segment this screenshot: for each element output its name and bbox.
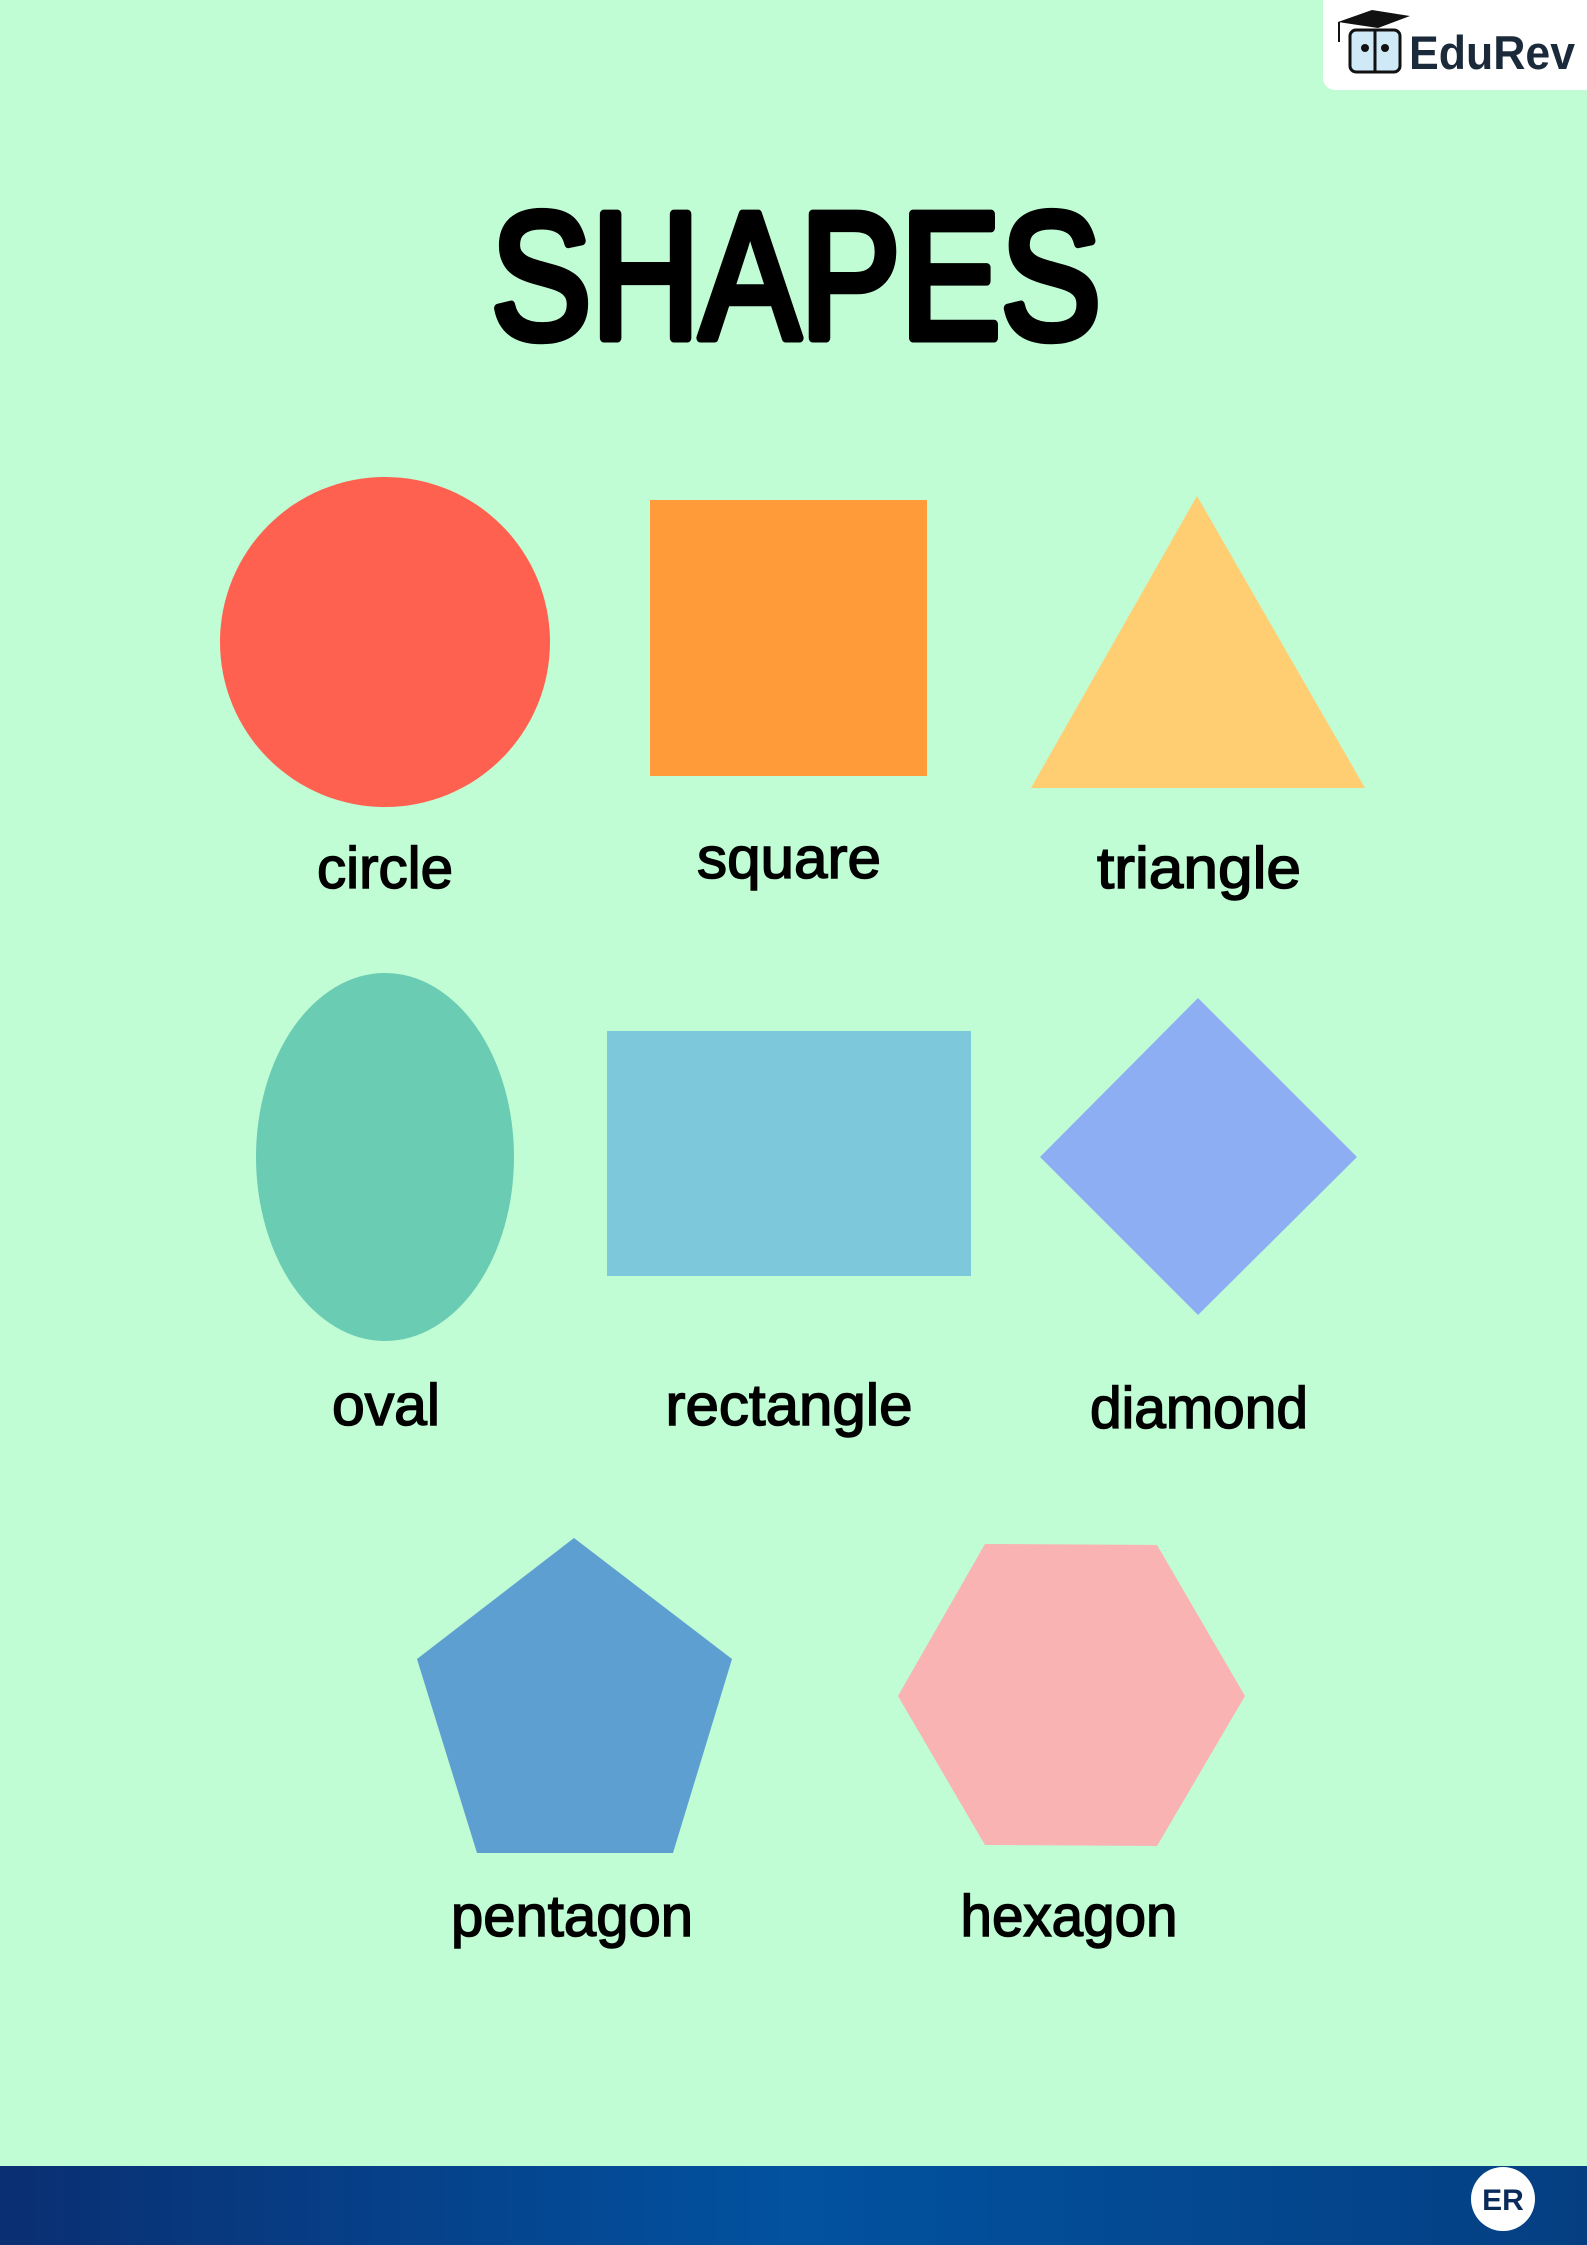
shape: hexagon: hexagon — [960, 1884, 1178, 1949]
shape: square — [650, 500, 927, 891]
footer bar — [0, 2166, 1587, 2245]
shape: circle — [220, 477, 550, 901]
shape: triangle — [1031, 496, 1365, 901]
shape: oval — [256, 973, 514, 1438]
shape: diamond: diamond — [1090, 1376, 1308, 1441]
shape: rectangle — [607, 1031, 971, 1438]
icon: ER badge: ER — [1482, 2184, 1524, 2217]
shape: pentagon — [417, 1538, 732, 1949]
shape: square: square — [697, 826, 881, 891]
logo: EduRev — [1323, 0, 1587, 90]
shape: pentagon: pentagon — [451, 1884, 693, 1949]
title: SHAPES — [491, 176, 1101, 377]
shape: hexagon — [898, 1544, 1245, 1949]
icon: graduation cap book — [1338, 10, 1410, 72]
shape: oval: oval — [332, 1373, 440, 1438]
shape: circle: circle — [317, 836, 453, 901]
shape: diamond — [1040, 998, 1357, 1441]
logo: EduRev: EduRev — [1409, 26, 1575, 79]
icon: ER badge — [1471, 2167, 1535, 2231]
shape: rectangle: rectangle — [666, 1373, 912, 1438]
shape: triangle: triangle — [1097, 836, 1301, 901]
